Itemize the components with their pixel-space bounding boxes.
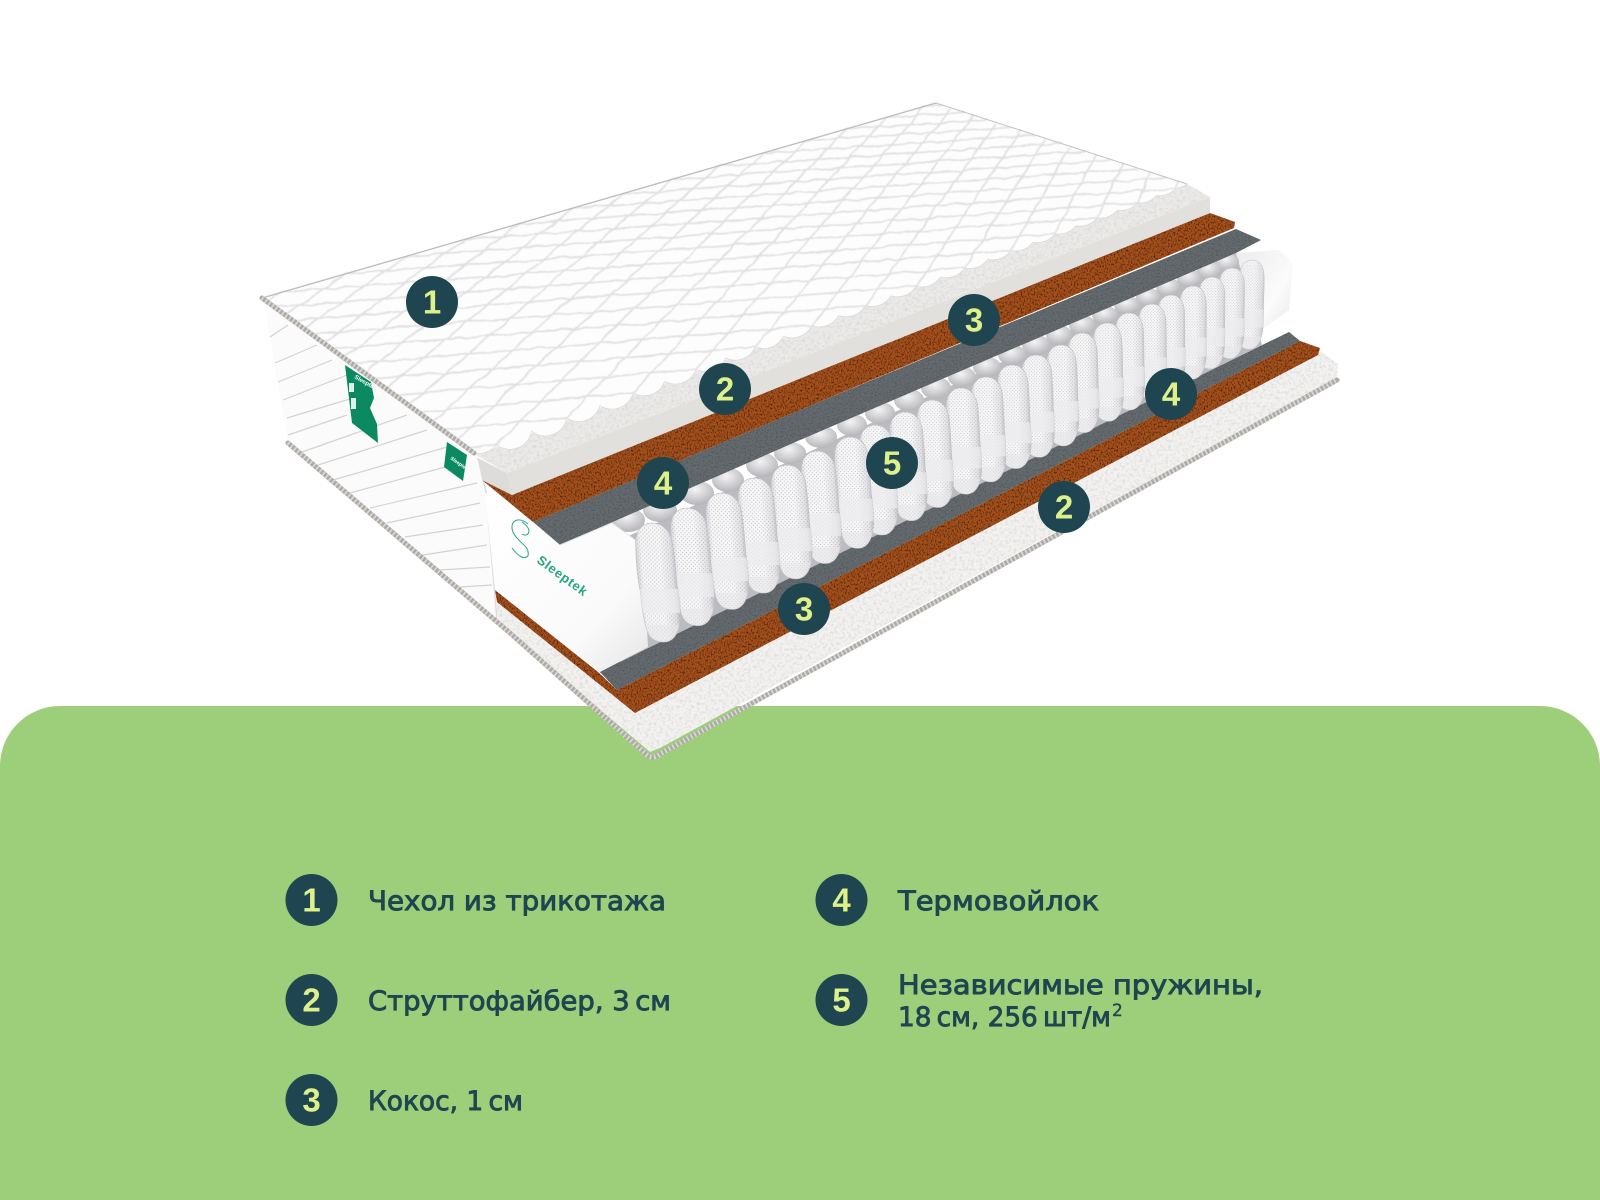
- marker 3: upper coconut: 3: [965, 302, 983, 338]
- number markers on the mattress: [406, 276, 1197, 635]
- cover quilting lines: [267, 105, 1178, 447]
- panel: green background: [0, 706, 1600, 1200]
- marker 2: upper strutofiber: [699, 363, 751, 415]
- legend item 1: 1: [302, 882, 321, 918]
- marker 2: lower strutofiber: [1038, 481, 1090, 533]
- marker 3: upper coconut: [948, 294, 1000, 346]
- marker 4: upper felt: [637, 457, 689, 509]
- legend item 4: [816, 874, 1099, 926]
- legend item 5: 5: [832, 982, 851, 1018]
- legend item 4: Термовойлок: [897, 886, 1099, 917]
- legend item 2: 2: [302, 982, 321, 1018]
- legend item 5: 18 см, 256 шт/м: [898, 1002, 1111, 1033]
- springs: back row: [611, 253, 1262, 662]
- illustration: mattress cross-section: [260, 102, 1340, 760]
- legend item 3: 3: [302, 1082, 321, 1118]
- piping: top side edge: [262, 298, 474, 453]
- legend item 3: [286, 1074, 523, 1126]
- side panel: quilted cover: [262, 298, 510, 633]
- layer: upper felt: [533, 229, 1261, 545]
- legend item 1: [286, 874, 666, 926]
- marker 4: lower felt: [1145, 368, 1197, 420]
- tag: green label large: Sleeptek: [353, 375, 378, 392]
- tag: green label large: [345, 365, 378, 443]
- marker 1: cover: 1: [423, 284, 441, 320]
- marker 1: cover: [406, 276, 458, 328]
- piping: top back edges: [262, 103, 1187, 298]
- layer: lower felt: [598, 332, 1300, 690]
- legend item 4: 4: [832, 882, 851, 918]
- legend item 1: Чехол из трикотажа: [368, 886, 666, 917]
- marker 4: upper felt: 4: [654, 464, 673, 502]
- marker 5: springs: 5: [883, 444, 901, 482]
- layer: lower coconut: [495, 341, 1320, 713]
- legend item 5: Независимые пружины,: [898, 970, 1263, 1001]
- logo wordmark: Sleeptek: [534, 552, 592, 600]
- foam block: right end: [1237, 250, 1293, 340]
- icon: Sleeptek logo mark: [512, 520, 529, 558]
- tag: green label small: [444, 442, 469, 481]
- foam block: branded end: [485, 493, 648, 672]
- piping: bottom edge: [288, 380, 1337, 757]
- marker 3: lower coconut: 3: [795, 590, 813, 628]
- marker 4: lower felt: 4: [1162, 376, 1181, 412]
- legend item 5: 2: [1112, 1001, 1123, 1021]
- legend item 5: [816, 970, 1263, 1033]
- layer: lower strutofiber: [497, 351, 1338, 752]
- legend item 2: [286, 974, 671, 1026]
- marker 5: springs: [866, 437, 918, 489]
- marker 3: lower coconut: [778, 583, 830, 635]
- legend: [286, 874, 1263, 1126]
- layer: upper coconut: [482, 213, 1235, 522]
- marker 2: upper strutofiber: 2: [716, 370, 734, 408]
- layer: upper strutofiber: [476, 184, 1210, 495]
- cover: quilted top surface: [262, 103, 1187, 454]
- tag: green label small: Sleeptek: [449, 456, 469, 473]
- springs: front row: [631, 260, 1268, 643]
- marker 2: lower strutofiber: 2: [1055, 488, 1073, 526]
- legend item 3: Кокос, 1 см: [368, 1086, 523, 1117]
- legend item 2: Струттофайбер, 3 см: [368, 986, 671, 1017]
